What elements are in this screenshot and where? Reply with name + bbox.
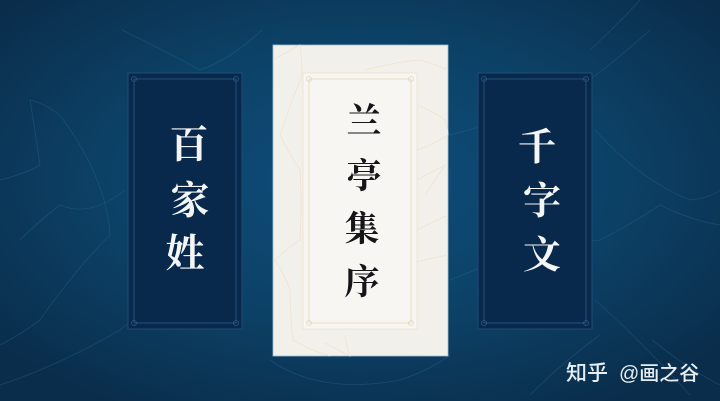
right panel inner frame: [482, 76, 588, 326]
right panel title: 千: [518, 127, 556, 169]
center inner panel: [303, 73, 417, 329]
left panel title: 家: [170, 180, 210, 223]
panel: left 百家姓: [128, 73, 242, 329]
center panel title: 兰: [346, 102, 382, 141]
right panel title: [518, 127, 561, 277]
left panel title: 姓: [165, 233, 205, 276]
right panel title: 字: [523, 181, 561, 223]
left panel title: [165, 124, 210, 276]
center panel title: 亭: [346, 157, 382, 196]
left panel title: 百: [169, 124, 209, 167]
panel: center 兰亭集序: [273, 45, 448, 356]
center panel title: [344, 102, 382, 302]
watermark: @画之谷: [619, 362, 699, 385]
left panel inner frame: [132, 76, 238, 326]
center panel title: 集: [344, 210, 380, 249]
center panel faint outlines: [273, 45, 448, 356]
right panel title: 文: [523, 235, 561, 277]
center inner frame: [306, 76, 414, 326]
center panel title: 序: [344, 263, 380, 302]
panel: right 千字文: [478, 73, 592, 329]
watermark: [566, 362, 699, 385]
watermark: 知乎: [566, 362, 608, 385]
